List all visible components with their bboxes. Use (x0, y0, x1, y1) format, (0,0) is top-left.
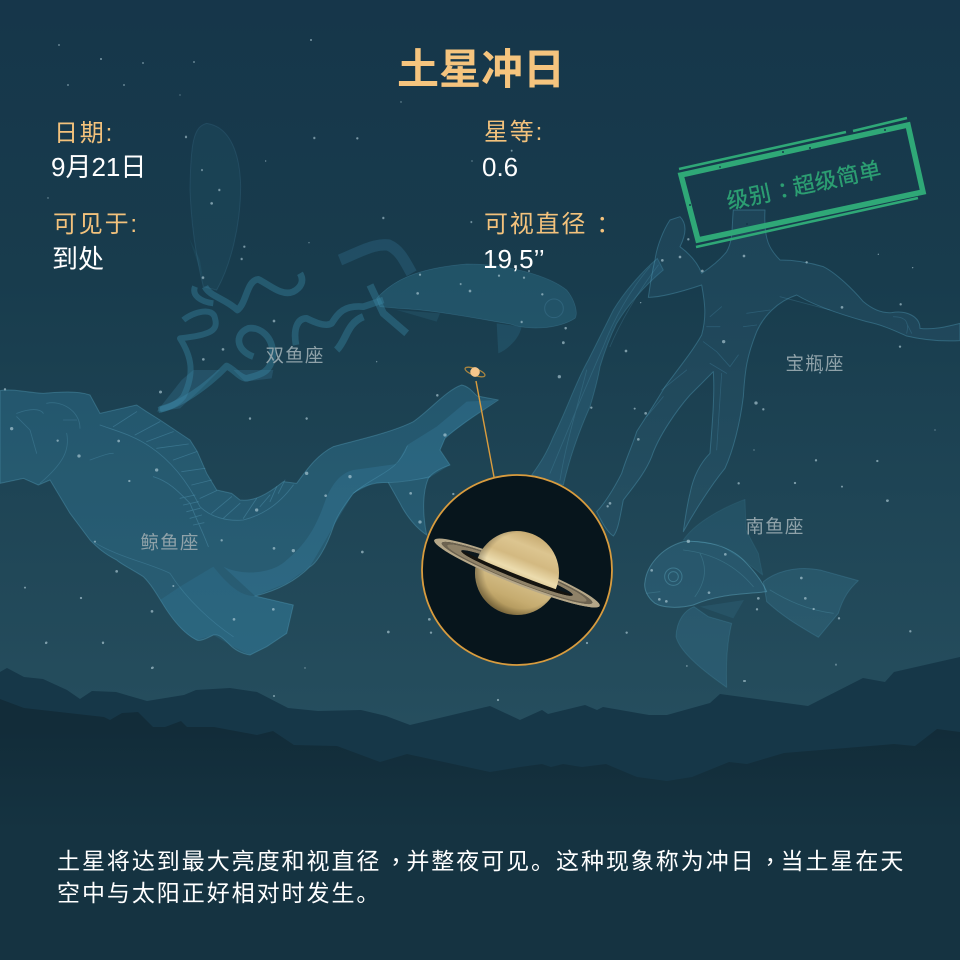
info: magnitude (482, 119, 544, 182)
constellation: Pisces (158, 123, 576, 410)
label: Pisces: 双鱼座 (265, 345, 325, 366)
icon: Saturn planet with rings (434, 531, 600, 615)
description text: ， (390, 842, 415, 868)
description text: 土星将达到最大亮度和视直径 (57, 848, 381, 874)
label: Piscis Austrinus: 南鱼座 (745, 516, 805, 537)
background stars (4, 39, 936, 701)
description text: 空中与太阳正好相对时发生。 (57, 880, 381, 906)
label: Aquarius: 宝瓶座 (785, 353, 845, 374)
icon: small Saturn marker (463, 364, 487, 380)
info: visibility: 到处 (52, 244, 104, 274)
constellation: Piscis Austrinus (645, 499, 858, 687)
info: date: 9月21日 (51, 152, 146, 182)
info: visibility (52, 211, 139, 274)
constellation: Cetus (0, 370, 498, 655)
stamp: difficulty level (679, 118, 923, 247)
body (645, 541, 767, 607)
info: magnitude: 星等: (484, 119, 544, 146)
info: apparent diameter (483, 211, 622, 274)
dorsal fin ribs (100, 412, 293, 520)
dorsal fin (683, 499, 763, 575)
stamp: difficulty level: 级别：超级简单 (724, 157, 884, 214)
info: apparent diameter: 可视直径 ： (484, 211, 622, 238)
whale body (0, 385, 498, 655)
info: apparent diameter: 19,5’’ (483, 244, 545, 274)
back mountain ridge (0, 657, 960, 800)
info: magnitude: 0.6 (482, 152, 518, 182)
pointer line from small Saturn to inset (476, 381, 494, 477)
constellation: Aquarius (532, 210, 960, 536)
tail (763, 568, 858, 637)
figure (597, 210, 960, 536)
info: date (51, 120, 146, 182)
label: Cetus: 鲸鱼座 (140, 532, 200, 553)
front mountain ridge and ground (0, 699, 960, 960)
description text: ， (765, 842, 790, 868)
description text: 当土星在天 (781, 848, 905, 874)
lower fin (676, 607, 732, 687)
whale tail highlight band (223, 400, 497, 596)
upper fin (157, 370, 220, 412)
info: visibility: 可见于: (53, 211, 139, 238)
water stream (532, 258, 663, 485)
description text: 并整夜可见。这种现象称为冲日 (406, 848, 756, 874)
description text (57, 842, 905, 906)
info: date: 日期: (54, 120, 114, 147)
Saturn inset circle (419, 475, 615, 665)
title: 土星冲日 (397, 46, 565, 93)
